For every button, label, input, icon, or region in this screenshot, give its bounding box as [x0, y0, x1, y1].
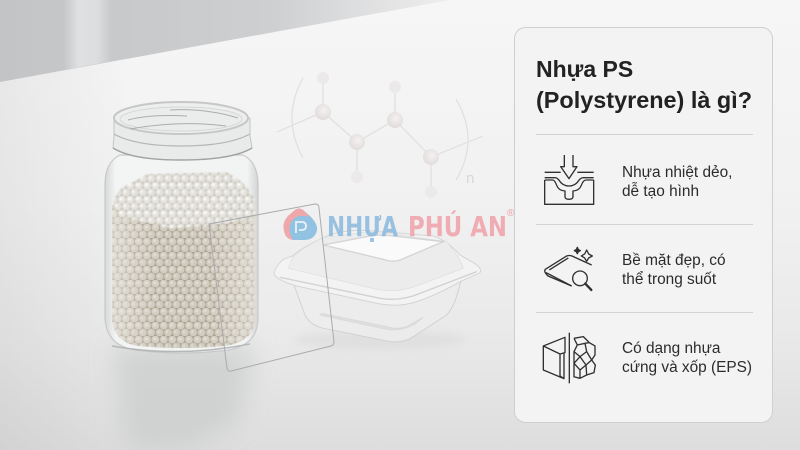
panel heading: (Polystyrene) là gì?: [536, 87, 752, 113]
container lid: [274, 230, 481, 305]
clear plastic sheet: [209, 204, 334, 371]
food container: [274, 230, 481, 349]
jar shadow: [112, 345, 255, 450]
glass jar with beads: [105, 102, 258, 353]
container base: [293, 282, 461, 342]
icon: surface and magnifier: [545, 247, 592, 290]
beads: [112, 172, 255, 348]
item 1: [545, 155, 732, 204]
watermark logo: PHÚ AN: [408, 209, 507, 243]
watermark logo: [284, 208, 515, 243]
brand name: NHỰA: [327, 210, 398, 243]
item 3 text: cứng và xốp (EPS): [622, 359, 752, 376]
item 3 text: Có dạng nhựa: [622, 340, 721, 357]
registered mark: ®: [507, 208, 515, 219]
panel heading: Nhựa PS: [536, 56, 633, 82]
molecule subscript n: n: [466, 170, 474, 187]
item 2: [545, 247, 726, 290]
item 3: [543, 333, 752, 383]
icon: molding press: [545, 155, 594, 204]
molecule diagram: [277, 72, 483, 198]
jar neck and rim: [113, 102, 252, 160]
item 1 text: dễ tạo hình: [622, 183, 699, 200]
item 2 text: thể trong suốt: [622, 271, 717, 288]
icon: solid block and foam: [543, 333, 595, 383]
logo mark: [284, 208, 317, 240]
item 1 text: Nhựa nhiệt dẻo,: [622, 164, 732, 181]
item 2 text: Bề mặt đẹp, có: [622, 252, 726, 269]
info panel: [514, 28, 772, 422]
